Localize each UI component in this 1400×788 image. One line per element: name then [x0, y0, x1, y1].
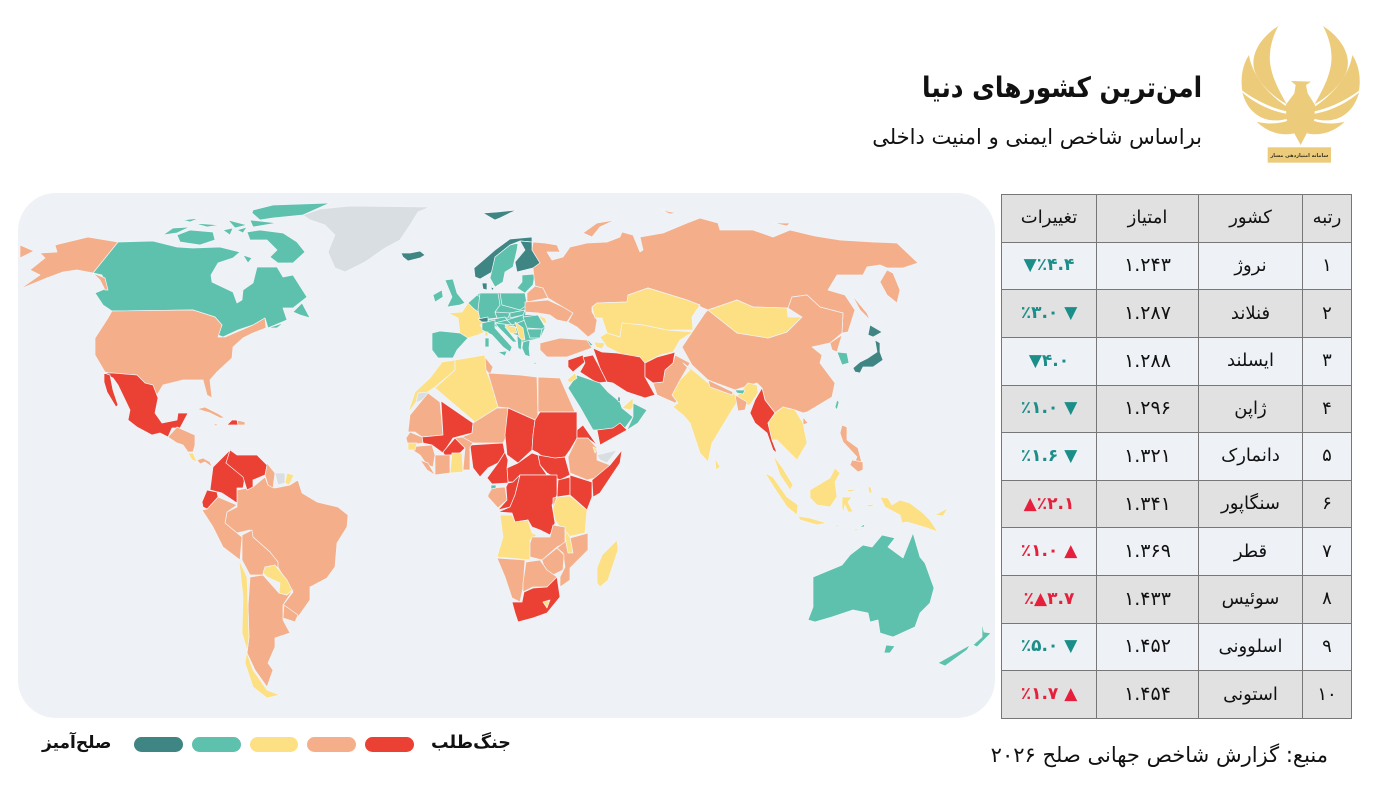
- data table: top ten countries: ۱.۲۸۷: [1124, 302, 1171, 324]
- data table: top ten countries: ٪۱.۶ ▼: [1021, 446, 1077, 466]
- data table: top ten countries: ۵: [1322, 445, 1332, 466]
- data table: top ten countries: ژاپن: [1234, 398, 1267, 419]
- subtitle: براساس شاخص ایمنی و امنیت داخلی: [872, 125, 1202, 149]
- southeast asia islands: [765, 468, 948, 532]
- data table: top ten countries: سوئیس: [1222, 588, 1279, 609]
- data table: top ten countries: ۱.۴۳۳: [1124, 588, 1171, 610]
- data table: top ten countries: ٪۳.۰ ▼: [1021, 303, 1077, 323]
- legend swatch: red: [365, 737, 414, 752]
- legend label: warlike: جنگ‌طلب: [431, 733, 511, 753]
- data table: top ten countries: ▲٪۲.۱: [1024, 494, 1074, 514]
- east and south asia: [672, 295, 883, 490]
- data table: top ten countries: ▼٪۴.۴: [1024, 255, 1074, 275]
- data table: top ten countries: ۸: [1322, 588, 1332, 609]
- data table: top ten countries: ایسلند: [1227, 350, 1274, 371]
- south america: [202, 448, 348, 698]
- data table: top ten countries: ۳: [1322, 350, 1332, 371]
- data table: top ten countries: ٪۱.۰ ▼: [1021, 398, 1077, 418]
- data table: top ten countries: ۶: [1322, 493, 1332, 514]
- data table: top ten countries: ۱.۴۵۴: [1124, 683, 1171, 705]
- data table: top ten countries: ۱۰: [1317, 684, 1337, 705]
- middle east: [567, 373, 647, 445]
- data table: top ten countries: ٪▲۳.۷: [1024, 589, 1074, 609]
- logo: golden eagle emblem: [1242, 26, 1360, 163]
- data table: top ten countries: اسلوونی: [1218, 636, 1283, 657]
- data table: top ten countries: [1001, 194, 1352, 719]
- data table: top ten countries: ۱.۲۸۸: [1124, 350, 1171, 372]
- data table: top ten countries: ۲: [1322, 303, 1332, 324]
- legend swatch: orange: [307, 737, 356, 752]
- data table: top ten countries: ۱.۳۴۱: [1124, 493, 1171, 515]
- data table: top ten countries: سنگاپور: [1221, 493, 1280, 514]
- data table: top ten countries: امتیاز: [1128, 207, 1167, 228]
- data table: top ten countries: ٪۱.۰ ▲: [1021, 541, 1077, 561]
- legend label: peaceful: صلح‌آمیز: [42, 733, 112, 753]
- africa: [406, 355, 622, 622]
- data table: top ten countries: ▼۴.۰: [1029, 351, 1069, 371]
- data table: top ten countries: رتبه: [1313, 207, 1341, 228]
- europe: [401, 210, 573, 364]
- data table: top ten countries: استونی: [1223, 684, 1278, 705]
- north america: usa: [20, 237, 266, 398]
- data table: top ten countries: دانمارک: [1221, 445, 1280, 466]
- data table: top ten countries: ۱.۲۴۳: [1124, 254, 1171, 276]
- legend: [41, 732, 511, 753]
- central asia: [540, 288, 700, 403]
- legend swatch: teal: [192, 737, 241, 752]
- data table: top ten countries: کشور: [1229, 207, 1272, 228]
- mexico and central america: [104, 373, 245, 467]
- data table: top ten countries: ۷: [1322, 541, 1332, 562]
- logo: golden eagle emblem: سامانه امتیازدهی مسار: [1269, 153, 1328, 159]
- data table: top ten countries: ٪۱.۷ ▲: [1021, 684, 1077, 704]
- greenland: [303, 206, 430, 272]
- legend swatch: yellow: [250, 737, 298, 752]
- legend swatch: darkest teal: [134, 737, 183, 752]
- data table: top ten countries: ٪۵.۰ ▼: [1021, 636, 1077, 656]
- data table: top ten countries: ۱.۳۶۹: [1124, 540, 1171, 562]
- north america: canada: [93, 203, 330, 337]
- title: امن‌ترین کشورهای دنیا: [922, 71, 1202, 104]
- data table: top ten countries: ۴: [1322, 398, 1332, 419]
- data table: top ten countries: قطر: [1234, 541, 1267, 562]
- source note: منبع: گزارش شاخص جهانی صلح ۲۰۲۶: [991, 743, 1328, 767]
- data table: top ten countries: ۱.۴۵۲: [1124, 635, 1171, 657]
- data table: top ten countries: نروژ: [1234, 255, 1267, 276]
- oceania: [808, 533, 991, 666]
- russia: [532, 208, 918, 337]
- data table: top ten countries: ۱: [1322, 255, 1332, 276]
- data table: top ten countries: ۹: [1322, 636, 1332, 657]
- data table: top ten countries: تغییرات: [1021, 207, 1077, 228]
- data table: top ten countries: ۱.۳۲۱: [1124, 445, 1171, 467]
- data table: top ten countries: ۱.۲۹۶: [1124, 397, 1171, 419]
- data table: top ten countries: فنلاند: [1231, 303, 1270, 324]
